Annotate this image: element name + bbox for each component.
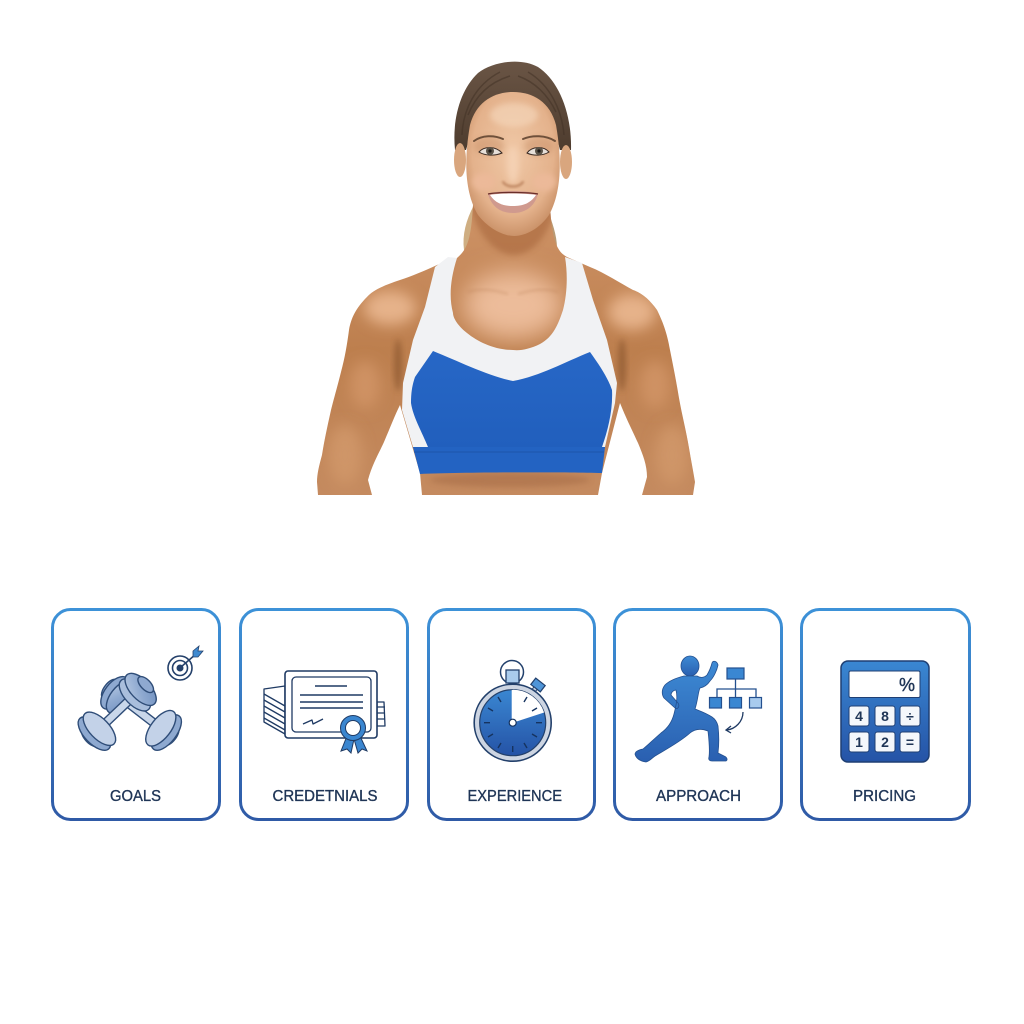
icon: lunging runner — [635, 656, 727, 762]
icon: target with arrow — [168, 646, 203, 680]
smile — [488, 191, 538, 213]
nose — [503, 182, 523, 186]
face — [466, 92, 560, 236]
icon: certificate stack — [264, 671, 385, 738]
panel: goals — [52, 610, 220, 820]
panel: pricing — [802, 610, 970, 820]
icon: dumbbells — [72, 666, 188, 756]
label: experience: EXPERIENCE — [468, 788, 562, 805]
icon: calculator: 2 — [881, 734, 889, 750]
sports bra white panels — [402, 257, 617, 447]
ponytail — [463, 205, 557, 250]
icon: calculator: = — [906, 734, 914, 750]
eyebrows — [474, 136, 555, 141]
trainer portrait — [317, 62, 695, 495]
panel: credentials — [240, 610, 408, 820]
icon: calculator: % — [899, 675, 915, 695]
icon: flow chart — [710, 668, 762, 708]
eyes — [479, 147, 549, 155]
arms, shoulders, neck and midriff — [317, 205, 695, 495]
icon: calculator: 4 — [855, 708, 863, 724]
label: credentials: CREDETNIALS — [272, 788, 378, 805]
panel: approach — [614, 610, 782, 820]
sports bra blue band — [413, 447, 605, 474]
icon: calculator — [841, 661, 929, 762]
label: pricing: PRICING — [853, 788, 916, 805]
ears — [454, 143, 572, 179]
icon: stopwatch — [474, 660, 551, 761]
icon: calculator: 8 — [881, 708, 889, 724]
icon: calculator: ÷ — [906, 708, 914, 724]
icon: calculator: 1 — [855, 734, 863, 750]
hair cap — [454, 62, 571, 150]
arrow: curved flow arrow — [726, 712, 743, 733]
icon: ribbon seal — [340, 716, 367, 753]
panel: experience — [428, 610, 594, 820]
label: goals: GOALS — [110, 788, 161, 805]
label: approach: APPROACH — [656, 788, 741, 805]
sports bra blue cup — [411, 351, 612, 447]
